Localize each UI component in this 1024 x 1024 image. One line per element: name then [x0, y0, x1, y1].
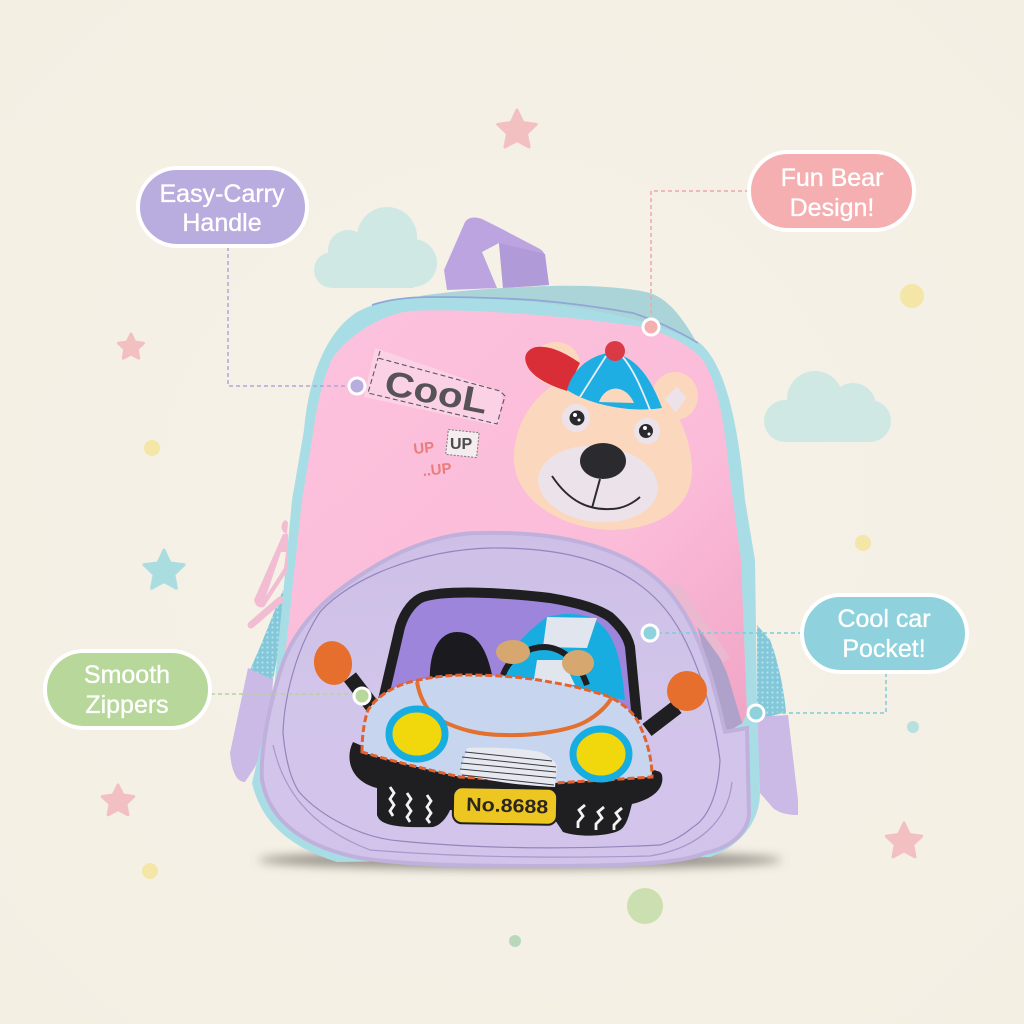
zipper gusset: [693, 610, 742, 734]
tyre marks: [390, 787, 622, 830]
bumper: [349, 742, 662, 836]
car body: [362, 675, 652, 783]
mouth: [552, 476, 640, 509]
callout: easy-carry handle: Handle: [182, 209, 262, 237]
callout: smooth zippers: Smooth: [84, 661, 170, 689]
teal star: [144, 550, 184, 588]
eyes: [562, 404, 590, 432]
pocket stitching: [283, 548, 720, 848]
up up up stickers: ..UP: [422, 460, 452, 480]
callout: cool car pocket: Pocket!: [842, 635, 926, 663]
license plate: No.8688: [466, 795, 549, 818]
license plate: [453, 787, 557, 825]
driver silhouette and wheel: [430, 632, 494, 685]
cap brim: [525, 347, 580, 391]
cool patch: [364, 348, 505, 426]
anchor dot: [349, 378, 365, 394]
callout: smooth zippers: Zippers: [85, 691, 169, 719]
mesh pocket right: [757, 625, 786, 720]
bear head: [514, 372, 692, 530]
cap: [567, 353, 662, 409]
decorative dots: [142, 284, 924, 947]
cloud left: [314, 207, 437, 288]
mesh pocket left: [250, 590, 286, 680]
pill: [138, 168, 307, 246]
callout: easy-carry handle: Easy-Carry: [159, 180, 285, 208]
bear: [514, 341, 698, 530]
front pocket: [262, 533, 749, 866]
up up up stickers: UP: [450, 436, 473, 453]
mirrors: [350, 677, 677, 730]
callout: cool car pocket: Cool car: [837, 605, 931, 633]
callout: easy-carry handle: [138, 168, 365, 394]
flap left: [230, 668, 273, 782]
back panel teal: [420, 286, 698, 345]
callout: fun bear design: Design!: [790, 194, 874, 222]
callout: fun bear design: [643, 152, 914, 335]
cool patch: CooL: [381, 364, 491, 422]
car: [310, 593, 707, 836]
leader line: [228, 247, 357, 386]
handle: [444, 218, 549, 290]
bear muzzle: [534, 440, 662, 528]
flap right: [757, 715, 798, 815]
cloud right: [764, 371, 891, 442]
pink front panel: [280, 310, 747, 760]
body trim: [252, 296, 760, 862]
up up up stickers: [413, 429, 479, 480]
headlights: [389, 709, 445, 759]
up up up stickers: UP: [413, 439, 435, 458]
bear ear left: [532, 342, 580, 386]
hood arc: [417, 682, 612, 735]
windshield: [383, 593, 637, 720]
backpack: [230, 218, 798, 866]
grille: [460, 748, 557, 787]
zipper pull left: [251, 520, 288, 625]
callout: cool car pocket: [642, 595, 967, 721]
nose: [580, 443, 626, 479]
ground shadow: [258, 851, 782, 869]
zipper pull right: [667, 584, 730, 662]
bear ear right: [652, 372, 698, 420]
callout: fun bear design: Fun Bear: [781, 164, 883, 192]
callout: smooth zippers: [45, 651, 370, 728]
decorative pink stars: [102, 110, 922, 857]
zipper line: [372, 297, 698, 343]
